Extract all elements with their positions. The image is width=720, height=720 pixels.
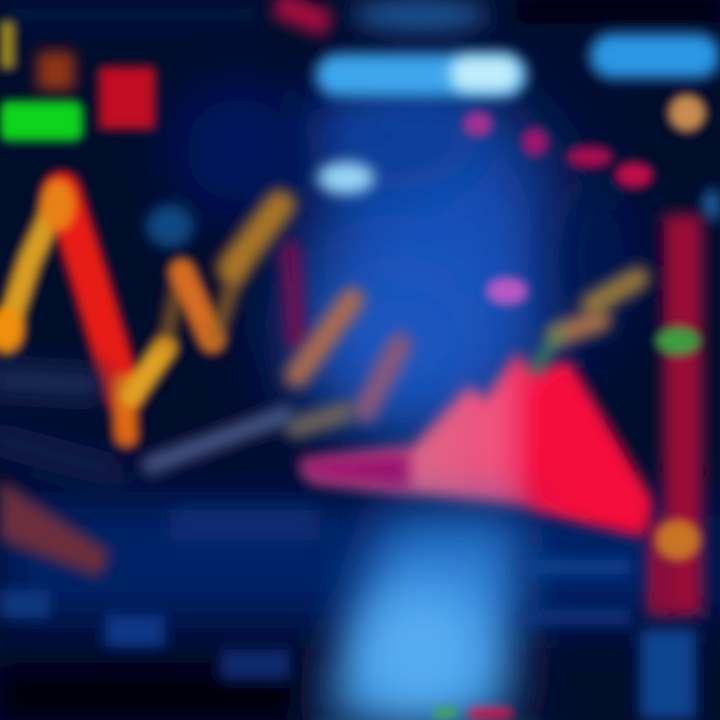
grey diagonal streak <box>0 380 285 470</box>
top light bars <box>146 0 720 248</box>
bottom colour dots <box>433 706 512 720</box>
red area chart <box>300 352 650 535</box>
lower blue light column <box>0 510 696 720</box>
red brown diagonal bar <box>0 480 110 578</box>
top right dashed line <box>464 95 720 221</box>
rising right line <box>535 278 638 370</box>
top left colour blocks <box>0 0 333 140</box>
right vertical red bar <box>648 215 702 615</box>
middle candlesticks <box>295 278 527 428</box>
main zigzag line <box>0 179 296 436</box>
